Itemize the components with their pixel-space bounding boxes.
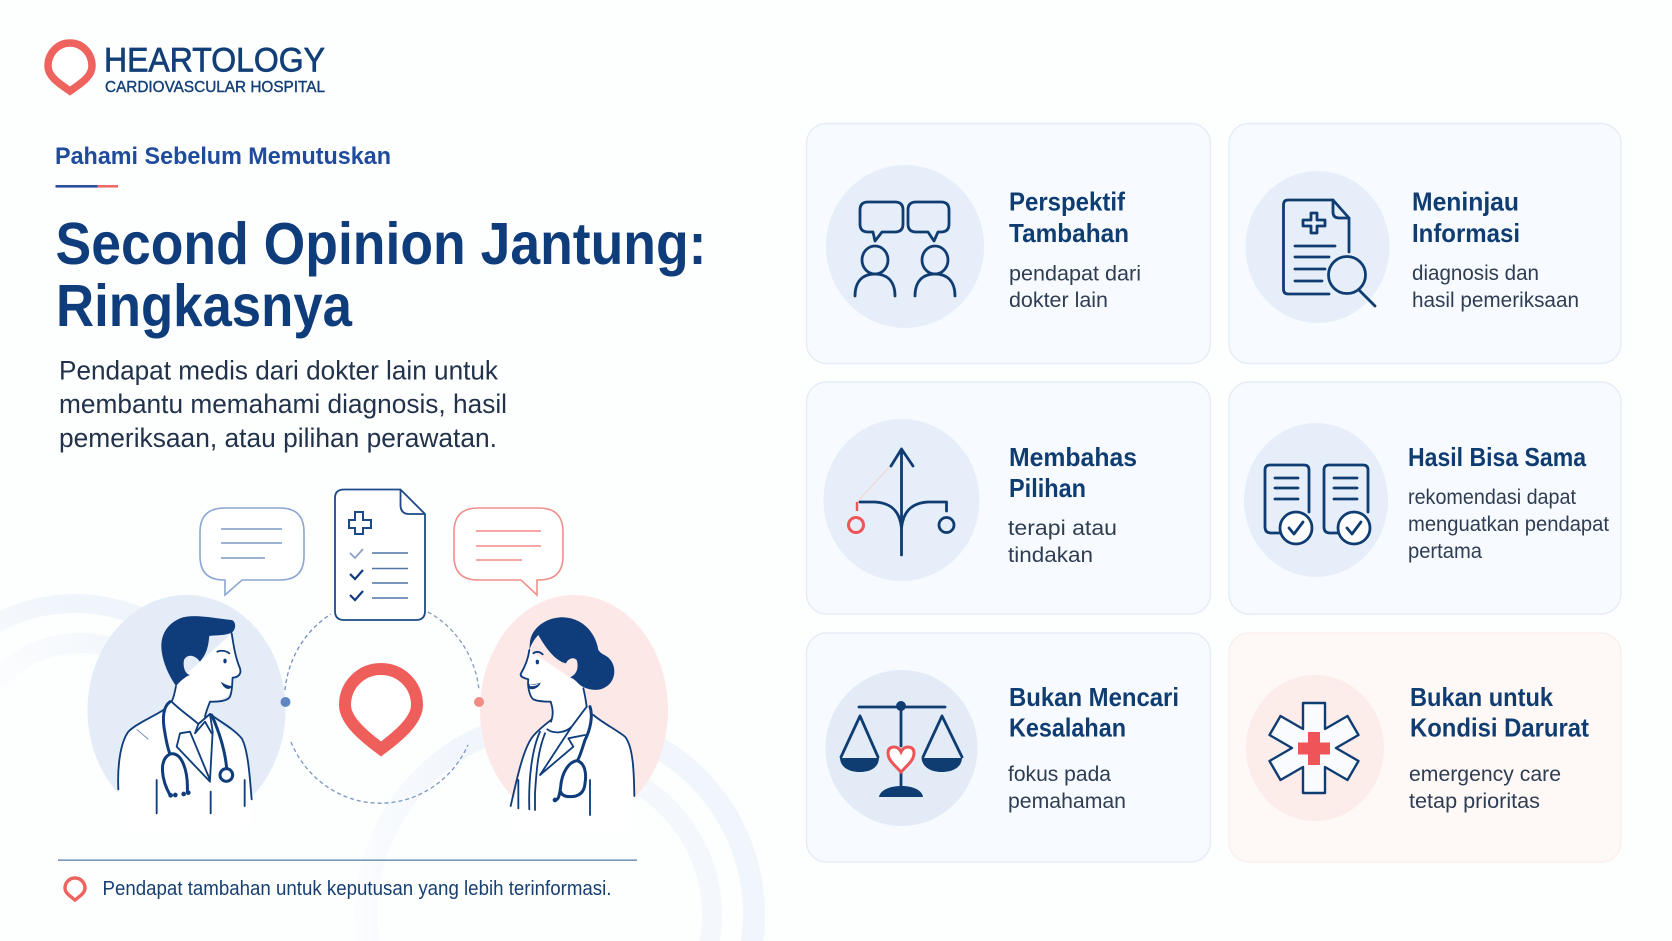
card description: pertama (1408, 539, 1482, 563)
logo name: HEARTOLOGY (104, 42, 325, 80)
intro text: Pendapat medis dari dokter lain untuk (59, 356, 499, 386)
speech bubble red (454, 508, 563, 595)
icon: two checked documents (1244, 423, 1388, 577)
eyebrow heading: Pahami Sebelum Memutuskan (55, 143, 391, 170)
icon: logo pin (48, 43, 92, 91)
icon: star of life with red cross (1246, 675, 1384, 821)
card title: Kesalahan (1009, 712, 1126, 742)
card description (1009, 262, 1141, 312)
illustration: two doctors consulting (88, 490, 668, 830)
card title: Tambahan (1009, 218, 1129, 248)
card title: Meninjau (1412, 186, 1519, 216)
intro text (59, 356, 507, 453)
card title (1412, 186, 1520, 248)
medical document (335, 490, 425, 620)
panel: Hasil Bisa Sama (1229, 382, 1621, 614)
card title: Bukan untuk (1410, 682, 1553, 712)
card title (1009, 682, 1179, 742)
footer divider (58, 860, 637, 861)
card description (1412, 261, 1579, 312)
icon: small pin (65, 878, 85, 900)
intro text: pemeriksaan, atau pilihan perawatan. (59, 423, 497, 453)
card title: Hasil Bisa Sama (1408, 442, 1586, 472)
logo subtitle: CARDIOVASCULAR HOSPITAL (105, 79, 325, 96)
panel: Bukan Mencari Kesalahan (806, 633, 1210, 862)
logo (48, 42, 325, 96)
icon: branching arrow (824, 419, 980, 581)
doctor man (118, 616, 252, 830)
footer text: Pendapat tambahan untuk keputusan yang lebih terinformasi. (102, 878, 612, 900)
card title: Perspektif (1009, 186, 1125, 216)
eyebrow underline (56, 185, 118, 188)
card description (1008, 516, 1117, 567)
card title (1410, 682, 1589, 742)
panel: Membahas Pilihan (806, 382, 1210, 614)
card title: Informasi (1412, 218, 1520, 248)
panel: Meninjau Informasi (1229, 124, 1621, 364)
card title: Kondisi Darurat (1410, 712, 1589, 742)
card description: fokus pada (1008, 762, 1111, 786)
card description: menguatkan pendapat (1408, 512, 1609, 536)
intro text: membantu memahami diagnosis, hasil (59, 389, 507, 419)
card description: diagnosis dan (1412, 261, 1539, 285)
card description: rekomendasi dapat (1408, 485, 1576, 509)
card title (1009, 186, 1129, 248)
card description: terapi atau (1008, 516, 1117, 540)
connector dot blue (280, 697, 290, 707)
card title: Pilihan (1009, 473, 1086, 503)
card title (1009, 442, 1137, 503)
card description (1409, 762, 1561, 813)
card description: tindakan (1008, 543, 1093, 567)
footer note (65, 878, 612, 900)
background circle: blue (88, 595, 286, 825)
connector dot red (474, 697, 484, 707)
card description: hasil pemeriksaan (1412, 288, 1579, 312)
icon: balance scale with heart (826, 670, 978, 826)
dashed connector circle (285, 612, 479, 803)
doctor woman (511, 617, 634, 830)
card description: emergency care (1409, 762, 1561, 786)
central pin (345, 669, 417, 749)
card description: pendapat dari (1009, 262, 1141, 286)
panel: Bukan untuk Kondisi Darurat (1229, 633, 1621, 862)
card description: tetap prioritas (1409, 789, 1540, 813)
card title: Bukan Mencari (1009, 682, 1179, 712)
card description (1008, 762, 1126, 813)
icon: document with magnifier (1246, 171, 1390, 323)
icon: two people with speech bubbles (826, 165, 984, 328)
background circle: red (480, 595, 668, 825)
card description: pemahaman (1008, 789, 1126, 813)
title: Second Opinion Jantung: (56, 211, 706, 277)
title: Ringkasnya (56, 273, 353, 339)
card title: Membahas (1009, 442, 1137, 472)
card description (1408, 485, 1609, 563)
card description: dokter lain (1009, 288, 1108, 312)
speech bubble blue (200, 508, 304, 595)
title (56, 211, 706, 339)
panel: Perspektif Tambahan (806, 124, 1210, 364)
